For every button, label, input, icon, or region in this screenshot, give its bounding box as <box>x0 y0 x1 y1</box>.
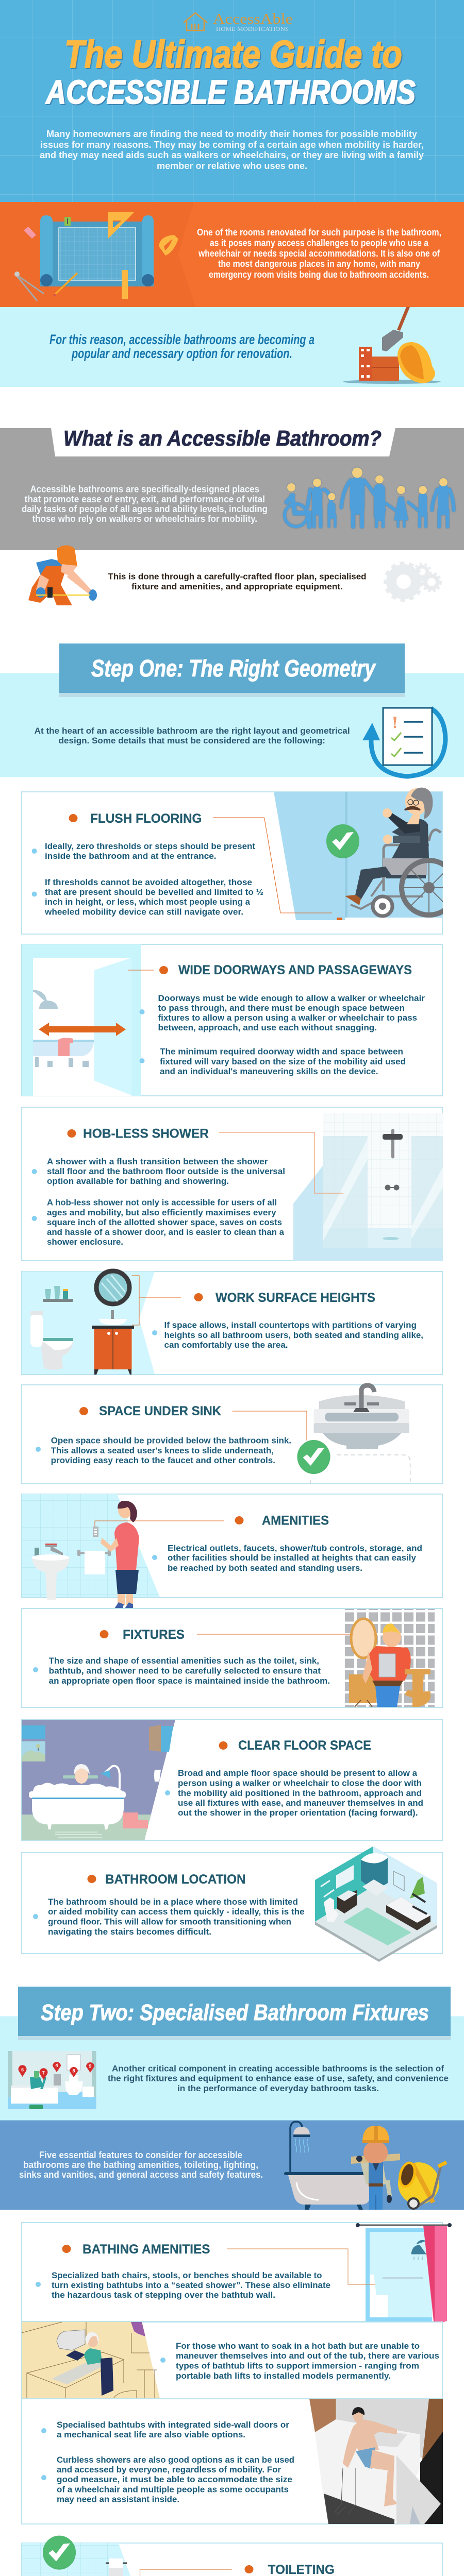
text: essential amenities: an appropriate open floor space is maintained inside the bathroom. <box>49 1676 330 1686</box>
connector line <box>233 1411 307 1440</box>
illustration: numbered bathroom fixtures <box>8 2051 96 2109</box>
illustration: shower curtain <box>356 2223 452 2323</box>
text: flush transition: stall floor and the bathroom floor outside is the universal <box>47 1166 285 1176</box>
text: minimum width <box>139 1047 406 1076</box>
illustration: vanity cabinet <box>92 1310 134 1375</box>
text: floor plan <box>108 572 366 591</box>
panel: what is an accessible bathroom <box>0 426 464 550</box>
connector lines <box>102 2569 232 2576</box>
icon: checklist with circular arrow <box>362 708 445 776</box>
title <box>45 32 416 111</box>
text: wide doorways: fixtures to allow a person using a walker or wheelchair to pass <box>158 1013 417 1023</box>
panel: blue band five essential features <box>0 2121 464 2210</box>
connector line <box>95 1521 224 1527</box>
icon: group of people <box>285 468 454 527</box>
text: open space: providing easy reach to the faucet and other controls. <box>51 1455 275 1465</box>
text: five essential features: Five essential features to consider for accessible <box>39 2150 242 2160</box>
text: curbless showers: of a wheelchair and multiple people as some occupants <box>57 2484 289 2495</box>
logo: AccessAble Home Modifications: AccessAble <box>213 11 293 27</box>
icon: gears <box>385 563 441 600</box>
illustration: shower head <box>33 991 57 1008</box>
panel: bathing amenities <box>22 2223 452 2323</box>
text: critical component: Another critical component in creating accessible bathrooms is the selection of <box>112 2063 444 2073</box>
illustration: round mirror <box>96 1271 129 1304</box>
pins: 8 <box>72 2068 75 2073</box>
text: bath chairs: the hazardous task of stepping over the bathtub wall. <box>52 2290 275 2300</box>
panel: curbless showers <box>22 2399 443 2524</box>
text: bathtub lifts <box>160 2341 439 2381</box>
header background <box>0 0 464 202</box>
pins: 6 <box>21 2067 24 2072</box>
heading: CLEAR FLOOR SPACE <box>238 1738 371 1753</box>
illustration: man in walk-in tub <box>309 2399 443 2524</box>
text: five essential features <box>19 2150 263 2180</box>
text: maximises space <box>32 1197 285 1247</box>
heading: HOB-LESS SHOWER <box>83 1126 209 1141</box>
icon: house <box>184 13 207 30</box>
text: popular and necessary option: popular and necessary option for renovation. <box>71 346 292 361</box>
intro paragraph: issues for many reasons. They may be coming of a certain age when mobility is harder, <box>40 140 424 150</box>
text: minimum width: and an individual's maneuvering skills on the device. <box>160 1066 378 1076</box>
text: five essential features: bathrooms are the bathing amenities, toileting, lighting, <box>23 2160 258 2170</box>
text: ample floor space: person using a walker or wheelchair to close the door with <box>178 1778 422 1788</box>
connector line <box>219 1132 343 1193</box>
text: bevelled thresholds: inch in height, or less, which most people using a <box>45 897 251 907</box>
text: definition: Accessible bathrooms are specifically-designed places <box>30 484 259 495</box>
text: maximises space: and hassle of a shower door, and is easier to clean than a <box>47 1227 285 1237</box>
text: countertops <box>152 1320 423 1350</box>
text: layout intro: At the heart of an accessible bathroom are the right layout and geometrical <box>35 726 350 736</box>
section: step two intro band <box>0 1987 464 2121</box>
text: open space <box>36 1436 291 1465</box>
text: countertops: heights so all bathroom users, both seated and standing alike, <box>164 1330 423 1340</box>
text: maximises space: A hob-less shower not only is accessible for users of all <box>47 1197 277 1208</box>
connector line <box>213 818 332 913</box>
text: curbless showers: good measure, it must be able to accommodate the size <box>57 2475 292 2484</box>
logo: AccessAble Home Modifications: HOME MODIFICATIONS <box>216 25 289 32</box>
text: flush transition <box>32 1157 285 1186</box>
panel: light band popular option <box>0 307 464 387</box>
text: heights: be reached by both seated and standing users. <box>168 1563 362 1573</box>
icon: green check <box>326 824 359 858</box>
heading: What is an Accessible Bathroom? <box>63 426 382 450</box>
text: open space: This allows a seated user's knees to slide underneath, <box>51 1446 274 1455</box>
heading: SPACE UNDER SINK <box>99 1404 221 1418</box>
connector line <box>128 970 154 971</box>
heading: WORK SURFACE HEIGHTS <box>216 1291 375 1305</box>
panel: clear floor space <box>22 1720 442 1840</box>
icon: green check <box>297 1440 330 1474</box>
heading: BATHING AMENITIES <box>82 2242 210 2257</box>
panel: fixtures <box>22 1608 442 1707</box>
text: layout intro <box>35 726 350 745</box>
pins: 9 <box>89 2064 92 2069</box>
text: specialised bathtubs <box>41 2420 289 2439</box>
illustration: man in wheelchair <box>345 787 443 918</box>
heading: FLUSH FLOORING <box>90 811 202 826</box>
text: ground floor: The bathroom should be in a place where those with limited <box>48 1897 298 1907</box>
text: renovated rooms <box>197 227 441 280</box>
connector line <box>227 2249 375 2284</box>
illustration: bathtub and towel <box>33 1038 94 1067</box>
heading: AMENITIES <box>262 1514 329 1528</box>
text: heights: Electrical outlets, faucets, shower/tub controls, storage, and <box>168 1544 422 1553</box>
panel: flush flooring <box>22 788 456 934</box>
text: five essential features: sinks and vanities, and general access and safety features. <box>19 2170 263 2180</box>
text: countertops: can comfortably use the area. <box>164 1340 288 1350</box>
intro paragraph: member or relative who uses one. <box>157 161 307 171</box>
text: zero thresholds: inside the bathroom and at the entrance. <box>45 851 217 861</box>
panel: hob-less shower <box>22 1107 443 1261</box>
text: heights <box>152 1544 422 1573</box>
text: definition: daily tasks of people of all ages and ability levels, including <box>22 504 268 514</box>
heading: FIXTURES <box>123 1628 185 1642</box>
text: ground floor <box>33 1897 305 1937</box>
illustration: cement mixer <box>396 2160 446 2209</box>
text: countertops: If space allows, install countertops with partitions of varying <box>164 1320 417 1330</box>
text: ample floor space: Broad and ample floor space should be present to allow a <box>178 1768 418 1778</box>
text: wide doorways: to pass through, and there must be enough space between <box>158 1003 405 1013</box>
intro paragraph: and they may need aids such as walkers or wheelchairs, or they are living with a family <box>40 150 424 160</box>
text: bevelled thresholds: If thresholds cannot be avoided altogether, those <box>45 877 252 887</box>
text: definition: that promote ease of entry, exit, and performance of vital <box>25 494 265 504</box>
icon: worker measuring floor <box>28 545 97 605</box>
panel: work surface heights <box>22 1271 442 1375</box>
text: definition: those who rely on walkers or wheelchairs for mobility. <box>32 514 257 524</box>
text: renovated rooms: as it poses many access challenges to people who use a <box>210 238 429 248</box>
text: ample floor space: use all fixtures with ease, and maneuver themselves in and <box>178 1798 423 1808</box>
illustration: towel rail <box>77 1550 111 1574</box>
text: bathtub lifts: portable bath lifts to installed models permanently. <box>176 2371 391 2381</box>
heading: step one <box>59 643 405 697</box>
text: bathtub lifts: types of bathtub lifts to support immersion - ranging from <box>176 2361 419 2371</box>
panel: orange band renovation <box>0 202 464 307</box>
text: minimum width: fixtured will vary based on the size of the mobility aid used <box>160 1057 406 1066</box>
heading: step one: Step One: The Right Geometry <box>91 655 376 682</box>
heading: step two <box>18 1987 451 2040</box>
text: bevelled thresholds: that are present should be bevelled and limited to ½ <box>45 887 263 897</box>
text: specialised bathtubs: a mechanical seat life are also viable options. <box>57 2430 245 2439</box>
text: essential amenities: The size and shape of essential amenities such as the toilet, sink, <box>49 1656 319 1666</box>
intro paragraph <box>40 129 424 171</box>
heading: BATHROOM LOCATION <box>105 1872 245 1887</box>
text: critical component: in the performance of everyday bathroom tasks. <box>177 2083 379 2093</box>
text: floor plan: fixture and amenities, and appropriate equipment. <box>131 582 343 591</box>
text: ample floor space <box>165 1768 423 1818</box>
text: open space: Open space should be provided below the bathroom sink. <box>51 1436 291 1446</box>
pins <box>18 2062 94 2080</box>
arrow: double headed width <box>39 1023 126 1036</box>
icon: blueprint and drafting tools <box>14 212 178 301</box>
text: wide doorways: Doorways must be wide enough to allow a walker or wheelchair <box>158 993 425 1003</box>
text: essential amenities <box>33 1656 330 1686</box>
text: ample floor space: the mobility aid positioned in the bathroom, approach and <box>178 1788 422 1798</box>
illustration: wall sink <box>313 1385 409 1449</box>
illustration: woman in bathtub <box>22 1720 175 1840</box>
illustration: shelf with bottles <box>43 1286 73 1302</box>
illustration: woman <box>101 1501 139 1608</box>
text: curbless showers: Curbless showers are also good options as it can be used <box>57 2455 294 2465</box>
text: layout intro: design. Some details that must be considered are the following: <box>59 736 325 745</box>
connector lines <box>132 1276 181 1325</box>
heading <box>235 1514 329 1528</box>
pins: 4 <box>55 2063 58 2068</box>
text: flush transition: option available for bathing and showering. <box>47 1176 229 1186</box>
illustration: toilet paper <box>106 2558 127 2576</box>
text: curbless showers <box>41 2455 294 2504</box>
illustration: pedestal sink <box>32 1544 70 1600</box>
text: bath chairs: turn existing bathtubs into a “seated shower”. These also eliminate <box>52 2280 330 2290</box>
panel: wide doorways and passageways <box>22 944 442 1096</box>
text: minimum width: The minimum required doorway width and space between <box>160 1047 403 1056</box>
illustration: bathtub with shower <box>284 2122 372 2210</box>
text: ground floor: navigating the stairs becomes difficult. <box>48 1927 211 1937</box>
panel: bathroom location <box>22 1846 442 1962</box>
text: zero thresholds: Ideally, zero thresholds or steps should be present <box>45 841 255 851</box>
panel: bathtub lifts <box>22 2322 442 2399</box>
intro paragraph: Many homeowners are finding the need to modify their homes for possible mobility <box>46 129 417 139</box>
illustration: tiled shower <box>323 1113 443 1248</box>
illustration: light switch <box>93 1527 98 1537</box>
dashed knee space <box>310 1455 410 1484</box>
text: wide doorways: between, approach, and use each without snagging. <box>158 1023 377 1032</box>
text: curbless showers: and accessed by everyone, regardless of mobility. For <box>57 2465 281 2475</box>
text: ample floor space: out the shower in the proper orientation (facing forward). <box>178 1808 418 1818</box>
illustration: woman in bath lift <box>22 2322 160 2398</box>
text: bevelled thresholds <box>32 877 263 917</box>
text: definition <box>22 484 268 524</box>
text: bathtub lifts: For those who want to soak in a hot bath but are unable to <box>176 2341 420 2351</box>
panel: amenities <box>22 1494 442 1608</box>
text: maximises space: square inch of the allotted shower space, saves on costs <box>47 1217 282 1227</box>
text: bath chairs <box>36 2270 330 2300</box>
text: bevelled thresholds: wheeled mobility device can still navigate over. <box>44 907 243 917</box>
text: ground floor: or aided mobility can access them quickly - ideally, this is the <box>48 1907 305 1917</box>
section: step one intro band <box>0 643 464 777</box>
title: The Ultimate Guide to <box>64 32 402 76</box>
text: critical component <box>108 2063 449 2093</box>
icon: bricks, trowel and hard hat <box>343 307 441 384</box>
text: bath chairs: Specialized bath chairs, stools, or benches should be available to <box>52 2270 322 2280</box>
illustration: toilet <box>30 1311 73 1370</box>
text: specialised bathtubs: Specialised bathtubs with integrated side-wall doors or <box>57 2420 289 2430</box>
text: heights: other facilities should be installed at heights that can easily <box>168 1553 417 1563</box>
logo: AccessAble Home Modifications <box>184 11 293 32</box>
text: curbless showers: may need an assistant inside. <box>57 2495 179 2504</box>
text: ground floor: ground floor. This will allow for smooth transitioning when <box>48 1917 291 1927</box>
text: flush transition: A shower with a flush transition between the shower <box>47 1157 268 1166</box>
text: renovated rooms: emergency room visits being due to bathroom accidents. <box>209 269 429 280</box>
panel: space under sink <box>22 1385 442 1484</box>
text: popular and necessary option: For this reason, accessible bathrooms are becoming a <box>49 332 314 347</box>
text: zero thresholds <box>32 841 255 861</box>
panel: toileting <box>22 2536 442 2576</box>
connector line <box>197 1634 351 1635</box>
text: bathtub lifts: maneuver themselves into and out of the tub, there are various <box>176 2351 439 2361</box>
text: floor plan: This is done through a carefully-crafted floor plan, specialised <box>108 572 366 581</box>
heading: WIDE DOORWAYS AND PASSAGEWAYS <box>178 963 412 977</box>
text: essential amenities: bathtub, and shower need to be carefully selected to ensure that <box>49 1666 321 1675</box>
text: popular and necessary option <box>49 332 314 361</box>
illustration: worker with plank <box>351 2126 400 2210</box>
illustration: handyman with tiles and toilet <box>343 1609 435 1707</box>
icon: green check <box>43 2536 76 2570</box>
text: wide doorways <box>139 993 425 1032</box>
illustration: isometric bathroom <box>315 1846 437 1962</box>
text: maximises space: ages and mobility, but also efficiently maximises every <box>47 1208 276 1217</box>
pins: 7 <box>42 2070 45 2075</box>
text: maximises space: shower enclosure. <box>47 1237 123 1247</box>
text: critical component: the right fixtures and equipment to enhance ease of use, safety, and convenience <box>108 2074 449 2083</box>
text: renovated rooms: the most dangerous places in any home, with many <box>218 259 420 269</box>
